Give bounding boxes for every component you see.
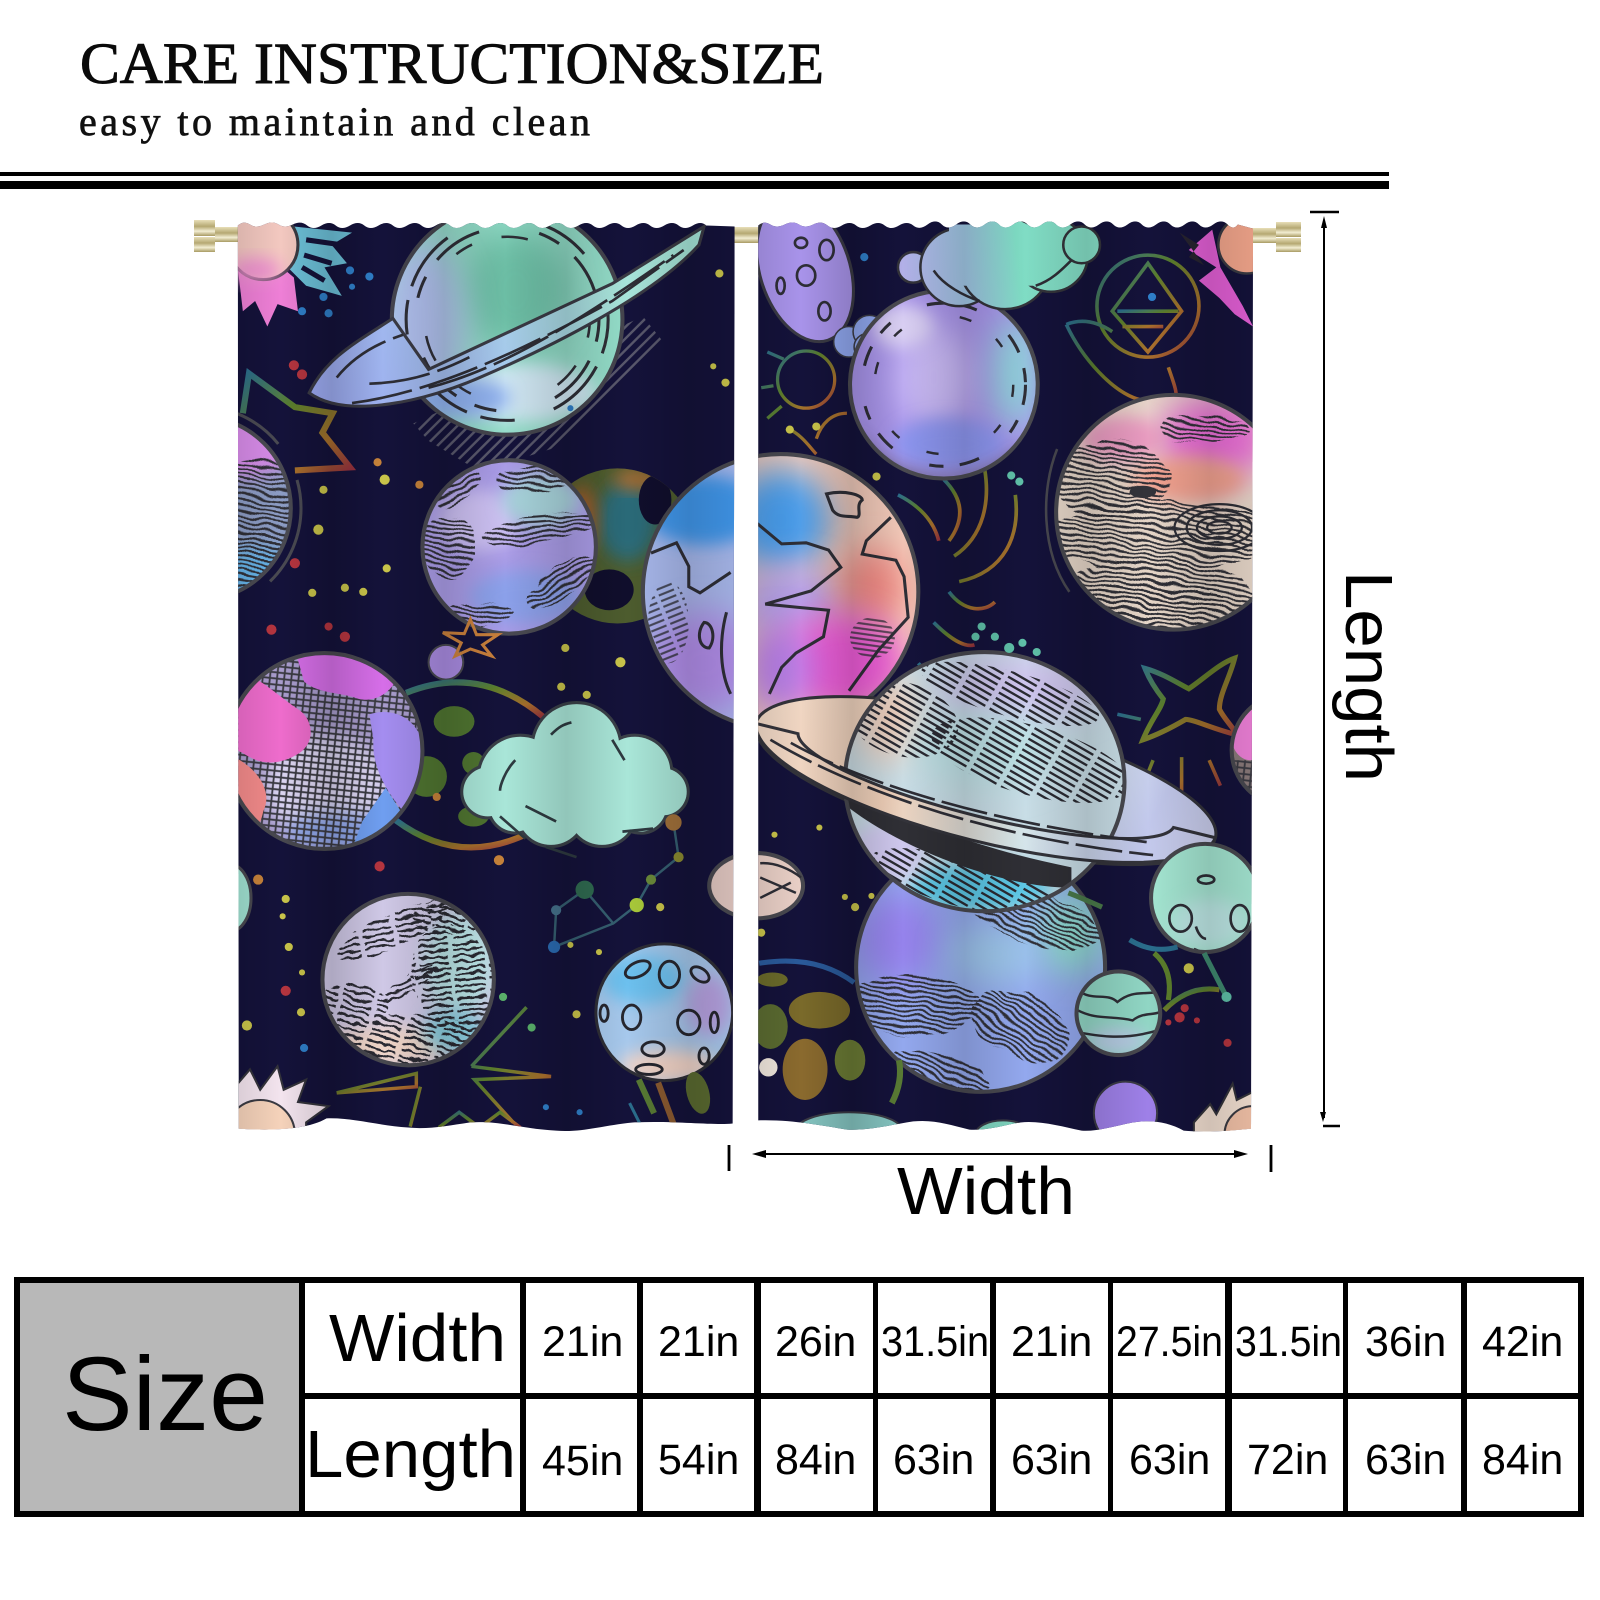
length row: 63in [1365,1436,1446,1484]
bottom right sun [1194,1084,1282,1163]
right finial [1276,222,1301,252]
star dots left [242,266,730,1115]
length row: Length [305,1417,516,1492]
mint cratered moon [1148,842,1260,959]
fabric folds left [230,209,740,1138]
rainbow arcs around pink earth [396,682,544,847]
top right sun [1180,223,1253,326]
title: CARE INSTRUCTION&SIZE [80,31,824,96]
fabric folds right [750,209,1260,1138]
width row: 26in [775,1318,856,1366]
width row: 21in [542,1318,623,1366]
big blue purple planet [847,837,1112,1100]
rainbow starburst [337,1007,551,1128]
small rainbow sun [761,351,847,454]
table cell backgrounds [305,1283,1578,1511]
curtain rod [194,220,1301,252]
length row: 63in [1011,1436,1092,1484]
asteroids [753,972,865,1100]
width row: 31.5in [1235,1318,1342,1366]
bottom left sun [238,1064,331,1130]
pink edge planet [1230,704,1252,796]
big ringed planet [741,648,1231,931]
swirl rainbow arcs [898,469,1016,684]
width row: 21in [1011,1318,1092,1366]
size header cell [20,1283,299,1511]
small striped planet right part [758,851,805,920]
width row [329,1301,1563,1376]
moon stalks and asteroid [628,1072,710,1122]
length row: 54in [658,1436,739,1484]
length label: Length [1331,571,1406,782]
width row: 36in [1365,1318,1446,1366]
length row [305,1417,1563,1492]
length dimension arrow [1310,212,1340,1126]
curtain illustration [238,221,1253,1132]
silver engraved planet [320,892,496,1068]
ring back [741,662,1231,899]
ringed planet top [309,199,704,435]
planet ring front [309,227,704,406]
cratered purple moon [758,222,855,343]
length row: 63in [1129,1436,1210,1484]
width label: Width [897,1154,1075,1229]
small purple moon and orange star [429,619,498,680]
rainbow symbol [1066,255,1199,406]
olive dark moon [572,468,678,624]
earth right half [758,452,920,730]
width dimension arrow [729,1145,1271,1172]
width row: 42in [1482,1318,1563,1366]
rainbow outline star [243,373,350,470]
length row: 84in [775,1436,856,1484]
olive blobs [415,706,488,826]
size header cell: Size [62,1336,268,1453]
width row: Width [329,1301,506,1376]
pink earth planet [238,651,424,851]
rainbow cross star [1117,658,1237,791]
width row: 27.5in [1116,1318,1223,1366]
length row: 45in [542,1437,623,1485]
width row: 21in [658,1318,739,1366]
earth left half [640,460,734,724]
mint cloud top [898,217,1100,309]
length row: 84in [1482,1436,1563,1484]
small mint wave planet [1071,969,1163,1061]
size table [14,1277,1584,1517]
star dots right [757,253,1232,1047]
rod segments [215,227,1276,243]
length row: 63in [893,1436,974,1484]
left finial [194,220,215,252]
constellation [548,814,684,953]
mint cloud [463,704,687,857]
small purple moon bottom [1094,1082,1157,1145]
small striped planet left part [707,854,734,916]
sun top left [238,222,352,326]
hatch shadow beneath saturn [413,316,663,471]
mint edge blob [238,866,252,930]
subtitle: easy to maintain and clean [79,99,590,144]
bottom mint blobs [796,1112,1031,1149]
width row: 31.5in [881,1318,989,1366]
small periwinkle cloud [833,314,876,358]
rainbow arcs right [759,893,1227,1103]
ring front [756,723,1215,862]
double rule divider [0,172,1389,189]
planet at left edge [238,412,302,594]
left curtain panel [238,222,735,1131]
purple sphere [847,291,1041,490]
purple planet [418,454,602,638]
right curtain panel [758,221,1253,1132]
cratered moon [592,939,735,1083]
length row: 72in [1247,1436,1328,1484]
pink hatched planet [1044,392,1253,632]
